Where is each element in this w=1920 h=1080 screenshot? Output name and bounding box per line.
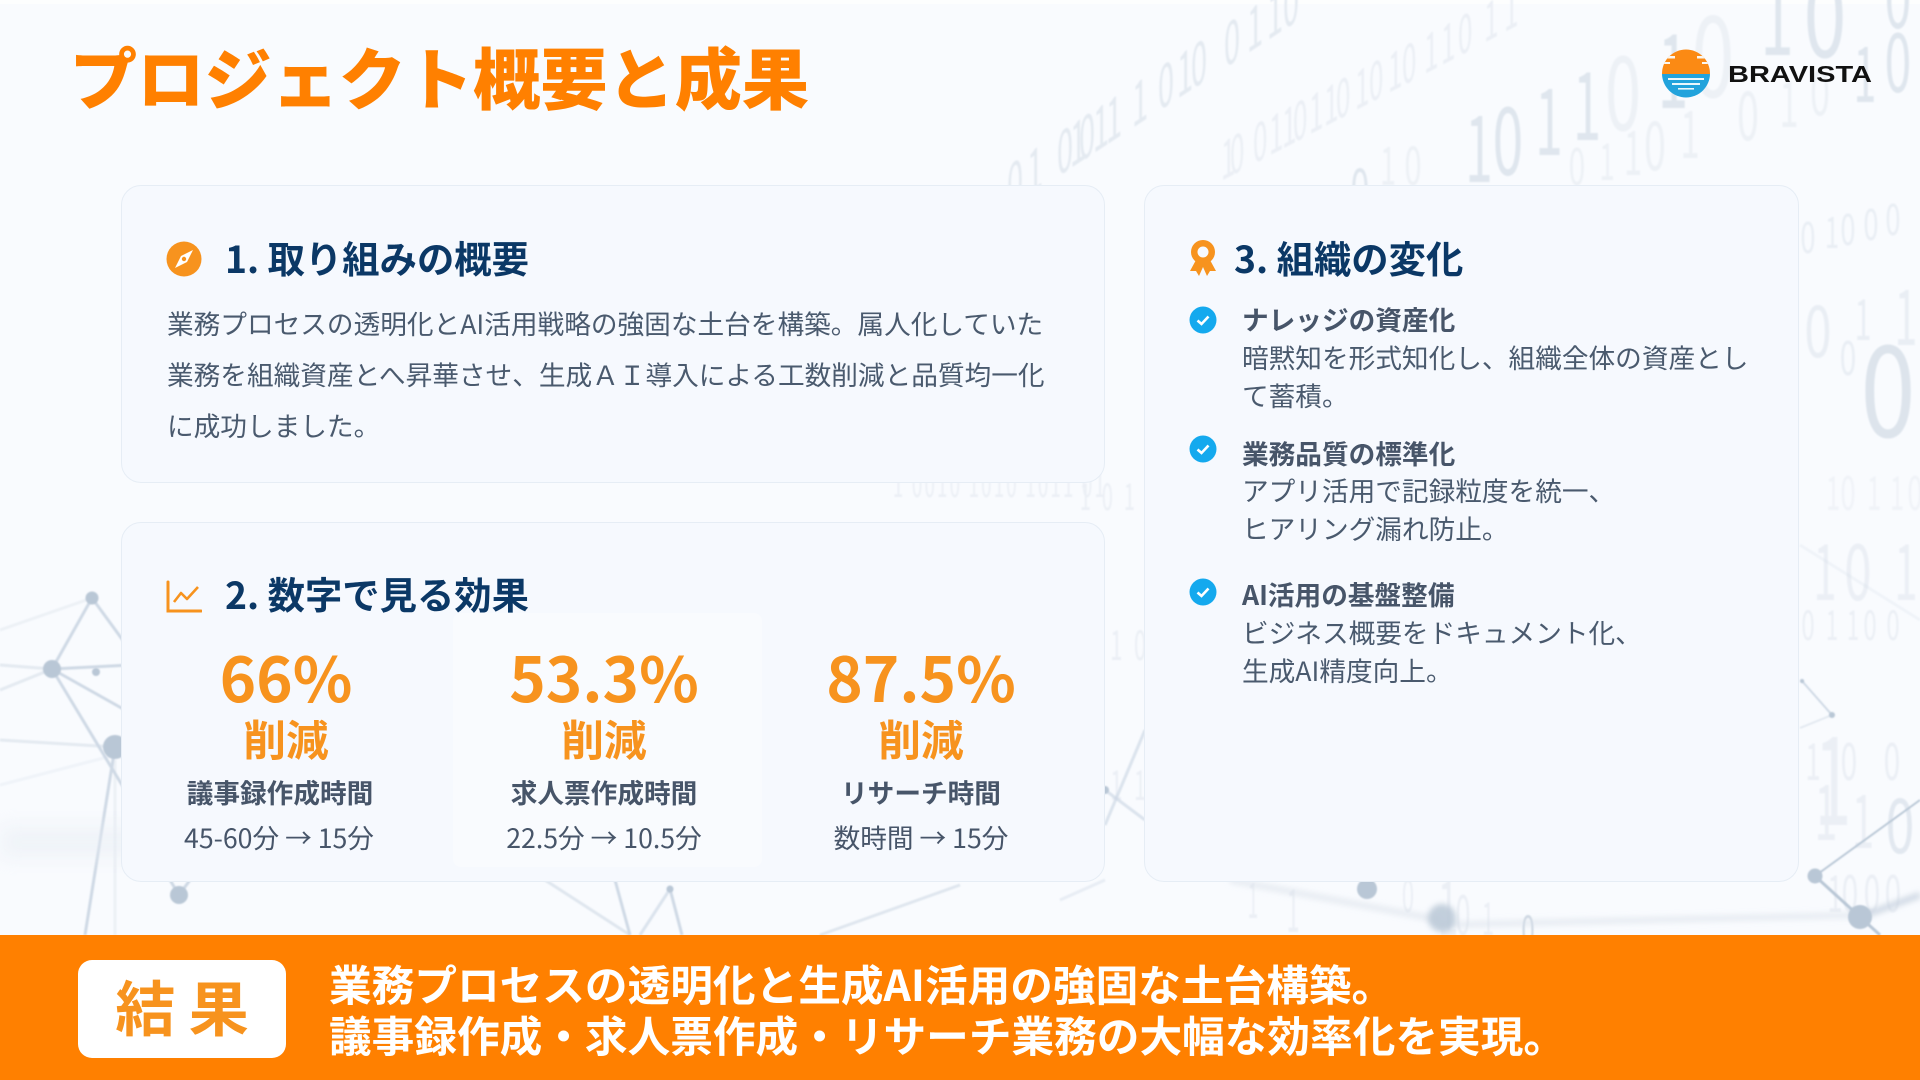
item 1: ナレッジの資産化: [1242, 299, 1455, 338]
background: binary digits and network: 1: [1867, 457, 1881, 524]
panel: 1. overview: [121, 185, 1105, 483]
item 1: て蓄積。: [1242, 375, 1349, 414]
stat: 53.3%: 削減: [561, 708, 647, 769]
result message: 業務プロセスの透明化と生成AI活用の強固な土台構築。: [329, 953, 1394, 1014]
background: binary digits and network: 1: [1847, 595, 1859, 652]
background: binary digits and network: 1: [1894, 512, 1918, 622]
panel 1 body text: に成功しました。: [167, 405, 380, 444]
stat: 66%: 45-60分 → 15分: [184, 817, 374, 856]
background: binary digits and network: 1: [1805, 722, 1821, 795]
result label: 結 果: [115, 962, 249, 1049]
check icon 1: [1190, 306, 1216, 334]
background: binary digits and network: 1: [1287, 865, 1299, 949]
title: プロジェクト概要と成果: [70, 27, 809, 124]
background: binary digits and network: 0: [1860, 295, 1916, 473]
background: binary digits and network: 1 0 1 1: [1080, 469, 1160, 521]
result label: [78, 960, 286, 1058]
background: binary digits and network: 1: [1780, 56, 1798, 146]
background: binary digits and network: 0: [1351, 146, 1369, 227]
stat: 53.3%: 53.3%: [509, 630, 699, 720]
background: binary digits and network: 0: [1885, 854, 1901, 927]
background: binary digits and network: 0: [1863, 595, 1877, 652]
stat: 87.5%: 87.5%: [826, 630, 1016, 720]
middle stat highlight: [453, 613, 762, 867]
item 3: ビジネス概要をドキュメント化、: [1242, 612, 1642, 651]
stat: 87.5%: 数時間 → 15分: [834, 817, 1008, 856]
background: binary digits and network: 0: [1864, 854, 1880, 927]
background: binary digits and network: 0: [1844, 513, 1872, 623]
panel: 2. numbers: [121, 522, 1105, 882]
background: binary digits and network: 1: [1826, 457, 1840, 524]
panel 2 heading: 2. 数字で見る効果: [225, 566, 529, 620]
stat: 53.3%: [506, 630, 702, 856]
background: binary digits and network: 1: [1815, 686, 1851, 860]
background: binary digits and network: 1: [1895, 259, 1917, 367]
background: binary digits and network: 0 1 0: [1087, 615, 1149, 672]
background: binary digits and network: 1: [1624, 106, 1642, 192]
panel 1 icon: compass: [166, 242, 202, 276]
logo: BRAVISTA: BRAVISTA: [1728, 61, 1872, 87]
background: binary digits and network: 0: [1840, 323, 1856, 389]
background: binary digits and network: 1: [1827, 854, 1843, 927]
background: binary digits and network: 0: [1841, 722, 1857, 795]
stat: 66%: 66%: [220, 630, 352, 720]
stat: 66%: 議事録作成時間: [187, 772, 373, 811]
background: binary digits and network: 0: [1521, 900, 1535, 957]
panel 2 icon: line chart: [166, 580, 202, 612]
background: binary digits and network: 1 0010 1010 1011 01: [893, 457, 1107, 507]
background: binary digits and network: 0: [1884, 722, 1900, 795]
background: binary digits and network: 0: [1863, 193, 1879, 253]
background: binary digits and network: 0: [1605, 15, 1641, 160]
panel 1 body text: [167, 303, 1045, 444]
panel 3 icon: award: [1190, 240, 1216, 276]
background: binary digits and network: 0: [1737, 64, 1759, 159]
stat: 66%: [184, 630, 374, 856]
background: binary digits and network: 1: [1855, 277, 1871, 356]
background: binary digits and network: 0: [1885, 188, 1901, 248]
panel: 3. organisation change: [1144, 185, 1799, 882]
background: binary digits and network: 1: [1890, 457, 1904, 524]
background: binary digits and network: 1: [1380, 126, 1396, 201]
background: binary digits and network: 0: [1404, 126, 1422, 201]
background: binary digits and network: 0: [1804, 277, 1832, 378]
background: binary digits and network: 1: [1826, 595, 1838, 652]
result message: [329, 953, 1566, 1065]
stat: 66%: 削減: [243, 708, 329, 769]
background: binary digits and network: 1: [1825, 199, 1839, 260]
item 3: 生成AI精度向上。: [1242, 650, 1453, 689]
background: binary digits and network: 1: [1438, 849, 1458, 957]
background: binary digits and network: 0: [1644, 94, 1666, 189]
background: binary digits and network: 1: [1815, 754, 1837, 862]
item 3: AI活用の基盤整備: [1242, 574, 1454, 613]
background: binary digits and network: 0: [1810, 47, 1830, 133]
stat: 53.3%: 22.5分 → 10.5分: [506, 817, 702, 856]
stat: 87.5%: 削減: [878, 708, 964, 769]
result bar: [0, 935, 1920, 1080]
panel 1 body text: 業務プロセスの透明化とAI活用戦略の強固な土台を構築。属人化していた: [167, 303, 1043, 342]
item 2: 業務品質の標準化: [1242, 433, 1455, 472]
background: binary digits and network: 0: [1842, 854, 1858, 927]
item 2: [1190, 433, 1615, 547]
item 2: ヒアリング漏れ防止。: [1242, 508, 1509, 547]
background: binary digits and network: 0: [1456, 873, 1470, 951]
background: binary digits and network: 1: [1813, 512, 1837, 622]
item 2: アプリ活用で記録粒度を統一、: [1242, 470, 1615, 509]
background: binary digits and network: 1: [1535, 51, 1563, 181]
panel 1 body text: 業務を組織資産とへ昇華させ、生成ＡＩ導入による工数削減と品質均一化: [167, 354, 1045, 393]
background: binary digits and network: 0: [1840, 457, 1856, 523]
logo: BRAVISTA: [1662, 50, 1872, 98]
background: binary digits and network: 0: [1493, 68, 1523, 202]
stat: 87.5%: リサーチ時間: [841, 772, 1001, 811]
background: binary digits and network: 0: [1402, 863, 1414, 926]
check icon 2: [1190, 436, 1216, 462]
background: binary digits and network: 1: [1599, 122, 1615, 195]
panel 3 heading: 3. 組織の変化: [1234, 230, 1463, 284]
stat: 53.3%: 求人票作成時間: [511, 772, 697, 811]
item 1: 暗黙知を形式知化し、組織全体の資産とし: [1242, 337, 1748, 376]
background: binary digits and network: 0 1 1: [1087, 755, 1149, 812]
stat: 87.5%: [826, 630, 1016, 856]
background: binary digits and network: 0: [1801, 595, 1815, 652]
background: binary digits and network: 0: [1840, 198, 1856, 258]
item 3: [1190, 574, 1642, 689]
background: binary digits and network: 1: [1465, 78, 1493, 208]
background: binary digits and network: 1: [1854, 16, 1876, 124]
background: binary digits and network: 1: [1852, 765, 1874, 869]
background: binary digits and network: 0: [1886, 595, 1900, 652]
result message: 議事録作成・求人票作成・リサーチ業務の大幅な効率化を実現。: [329, 1004, 1566, 1065]
background: binary digits and network: 0: [1885, 0, 1911, 115]
background: binary digits and network: 0: [1569, 127, 1585, 200]
check icon 3: [1190, 578, 1216, 606]
background: binary digits and network: 1: [1680, 84, 1700, 177]
background: binary digits and network: 1: [1248, 863, 1258, 932]
item 1: [1190, 299, 1748, 414]
background: binary digits and network: 1: [1573, 35, 1601, 167]
background: binary digits and network: 0: [1800, 206, 1816, 266]
background: binary digits and network: 0: [1886, 768, 1914, 875]
panel 1 heading: 1. 取り組みの概要: [225, 230, 529, 284]
background: binary digits and network: 1: [1482, 886, 1494, 949]
